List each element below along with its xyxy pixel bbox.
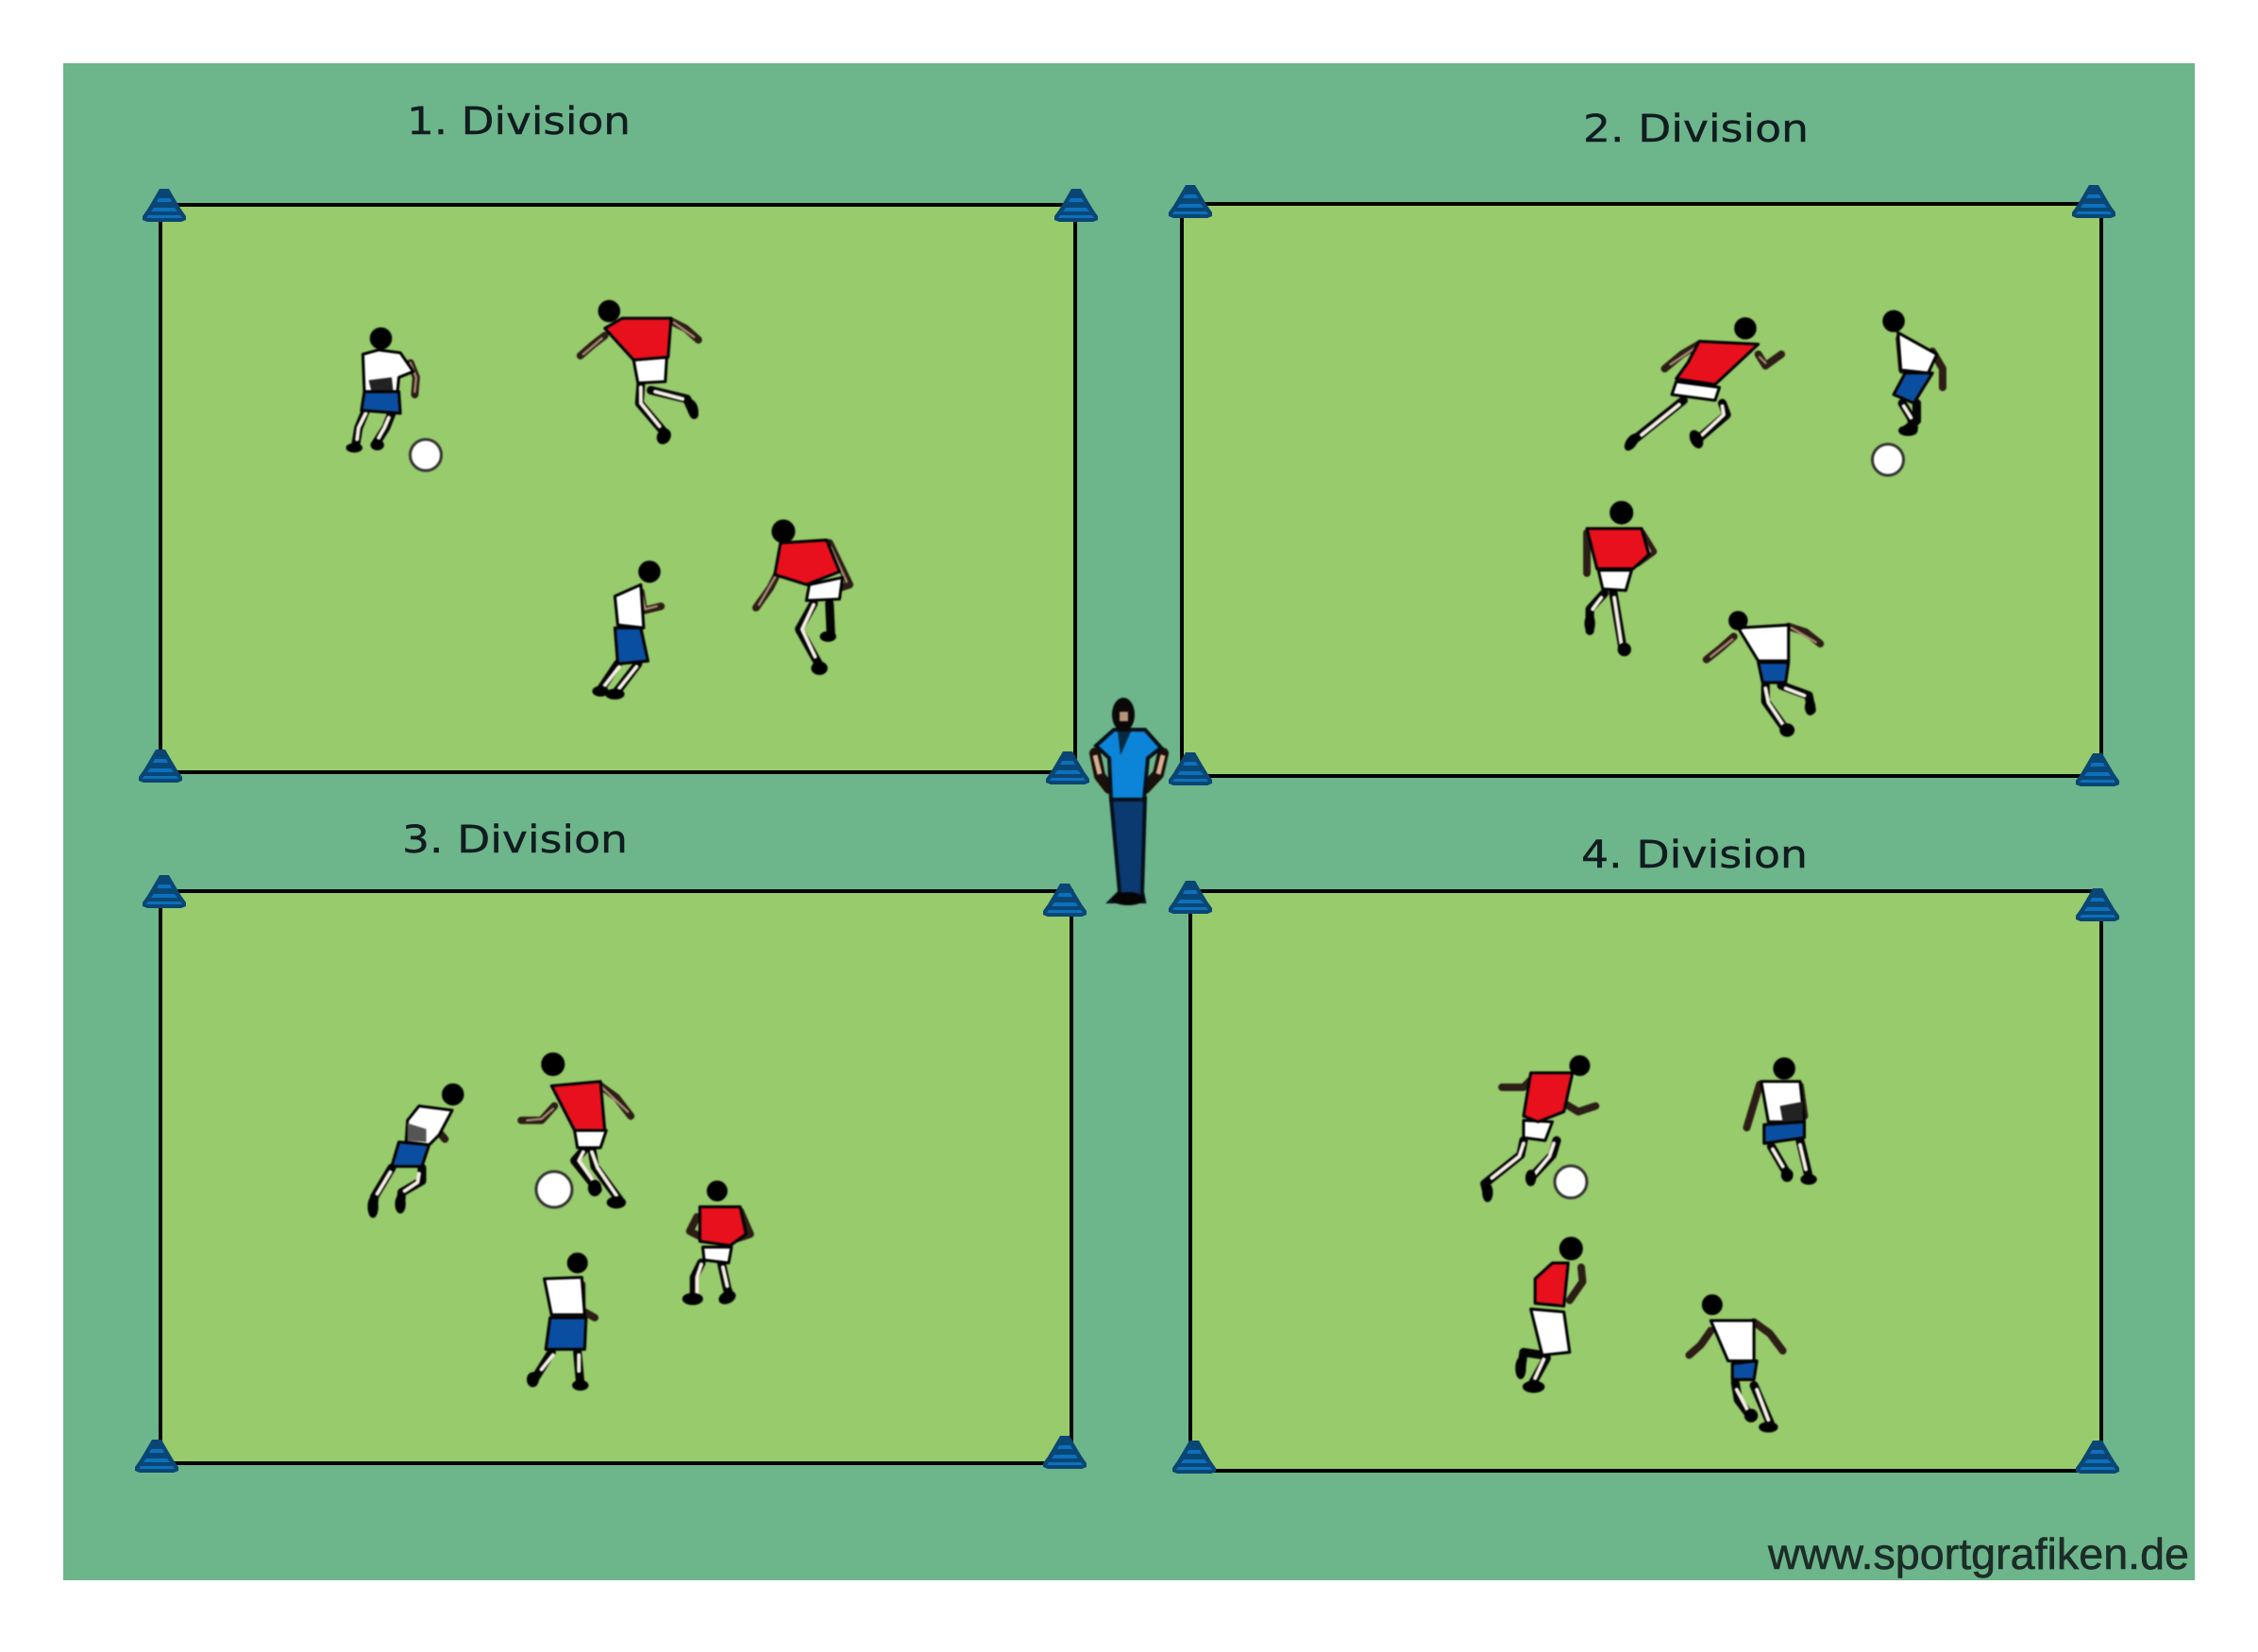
player: white from behind — [528, 1255, 595, 1390]
player: red standing — [683, 1182, 750, 1306]
watermark: www.sportgrafiken.de — [1767, 1529, 2189, 1578]
field: 2. Division — [1169, 108, 2119, 786]
player: white leaning — [1707, 613, 1820, 736]
ball — [1555, 1166, 1587, 1198]
field: 1. Division — [139, 100, 1098, 784]
heading 3: 3. Division — [402, 818, 628, 862]
player: white with ball — [347, 329, 416, 451]
referee arms — [1095, 753, 1163, 788]
cones 3 — [135, 875, 1087, 1473]
field: 4. Division — [1169, 834, 2119, 1474]
heading 1: 1. Division — [407, 100, 631, 143]
player: red sprinting — [1623, 319, 1781, 451]
referee collar — [1118, 732, 1131, 755]
player: red dribbling — [521, 1054, 631, 1207]
pitch 4 — [1190, 891, 2101, 1471]
pitch 1 — [160, 205, 1075, 772]
ball — [1873, 444, 1903, 476]
pitch 3 — [160, 891, 1071, 1463]
player: white crouched — [369, 1085, 463, 1217]
referee trousers — [1110, 799, 1145, 902]
player: red long shorts — [1516, 1239, 1583, 1391]
referee — [1095, 698, 1163, 905]
pitch 2 — [1182, 204, 2101, 776]
cones 2 — [1169, 185, 2119, 786]
player: white waiting — [1746, 1059, 1816, 1184]
player: red with ball — [1483, 1057, 1595, 1201]
player: white with ball — [1884, 312, 1943, 435]
referee head — [1112, 698, 1135, 732]
referee shirt — [1096, 730, 1161, 800]
referee shoes — [1112, 892, 1144, 905]
player: white standing — [594, 563, 661, 699]
ball — [410, 440, 442, 470]
player: red running — [581, 302, 699, 446]
cones 4 — [1169, 881, 2119, 1474]
cones 1 — [139, 189, 1098, 784]
ball — [536, 1172, 572, 1207]
heading 2: 2. Division — [1583, 108, 1809, 151]
heading 4: 4. Division — [1581, 834, 1808, 877]
field: 3. Division — [135, 818, 1087, 1473]
player: red bending — [756, 521, 850, 674]
player: red jogging — [1586, 502, 1653, 655]
player: white running away — [1689, 1296, 1783, 1431]
